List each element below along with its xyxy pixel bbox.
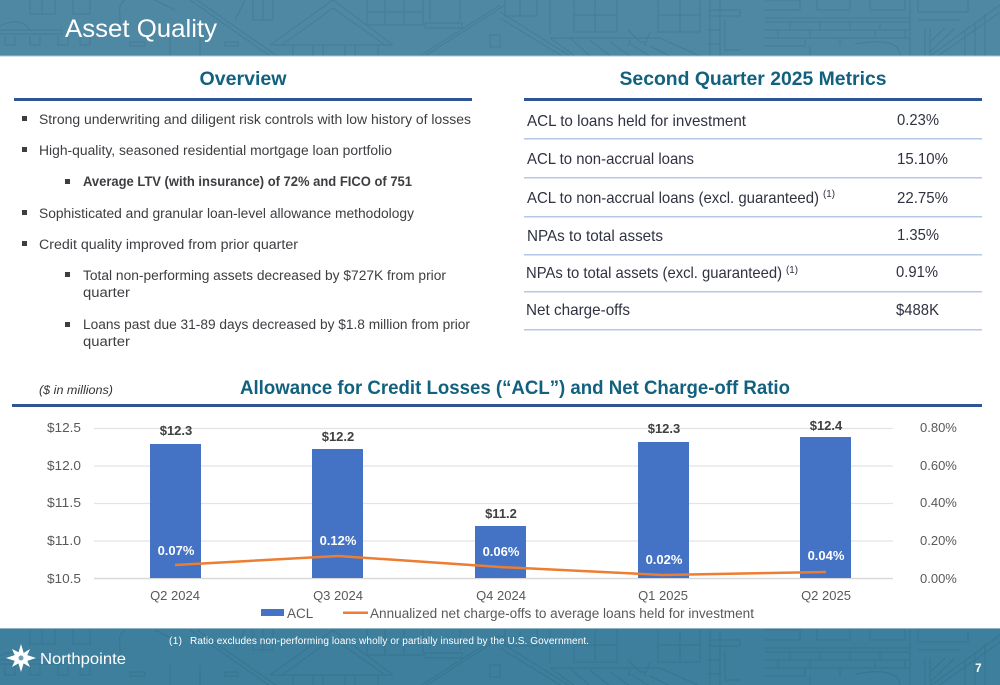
overview bullet list: quarter [83,334,131,349]
ACL value labels: $12.2 [322,429,354,444]
metrics table: 1.35% [897,227,939,244]
metrics table [524,112,982,330]
overview bullet list: Strong underwriting and diligent risk controls with low history of losses [39,112,471,127]
right axis labels: 0.20% [920,533,957,548]
overview bullet list [22,112,471,349]
right axis labels [920,420,957,586]
metrics table: (1) [823,189,835,200]
legend: ACL [287,606,314,621]
icon: compass star [6,644,36,672]
metrics table: ACL to loans held for investment [527,113,747,130]
ratio labels [158,533,845,567]
overview bullet list: Loans past due 31-89 days decreased by $1.8 million from prior [83,317,471,332]
ACL value labels: $12.3 [160,423,192,438]
chart heading: Allowance for Credit Losses (“ACL”) and Net Charge-off Ratio [240,378,790,399]
overview bullet list: High-quality, seasoned residential mortgage loan portfolio [39,143,392,158]
overview bullet list: Sophisticated and granular loan-level allowance methodology [39,206,414,221]
ratio labels: 0.07% [158,543,195,558]
metrics table: 0.23% [897,112,939,129]
metrics table: 22.75% [897,190,948,207]
category labels: Q2 2025 [801,588,851,603]
logo wordmark: Northpointe [40,651,126,668]
overview heading: Overview [200,69,287,90]
net charge-off line [175,556,826,575]
legend: Annualized net charge-offs to average loans held for investment [370,606,754,621]
title: Asset Quality [65,15,218,43]
metrics table: ACL to non-accrual loans (excl. guaranteed) [527,190,819,207]
metrics table: $488K [896,302,939,319]
metrics table: Net charge-offs [526,302,630,319]
metrics heading: Second Quarter 2025 Metrics [620,69,886,90]
category labels: Q3 2024 [313,588,363,603]
metrics table: NPAs to total assets (excl. guaranteed) [526,265,782,282]
footnote: (1) [169,636,182,647]
ACL value labels: $12.4 [810,418,843,433]
category labels: Q2 2024 [150,588,200,603]
ACL value labels [160,418,843,521]
right axis labels: 0.80% [920,420,957,435]
metrics table: 15.10% [897,151,948,168]
left axis labels: $11.0 [47,533,81,548]
right axis labels: 0.60% [920,458,957,473]
overview bullet list: Total non-performing assets decreased by $727K from prior [83,268,447,283]
page number: 7 [975,661,982,675]
metrics table: 0.91% [896,264,938,281]
ratio labels: 0.04% [808,548,845,563]
left axis labels: $10.5 [47,571,81,586]
category labels: Q1 2025 [638,588,688,603]
left axis labels: $12.0 [47,458,81,473]
overview bullet list: quarter [83,285,131,300]
chart: ACL and net charge-off ratio [47,418,957,621]
category labels [150,588,851,603]
logo: Northpointe [6,644,126,672]
ACL bars [150,437,851,578]
right axis labels: 0.40% [920,495,957,510]
panel: overview [14,69,472,349]
right axis labels: 0.00% [920,571,957,586]
left axis labels: $11.5 [47,495,81,510]
footnote: Ratio excludes non-performing loans wholly or partially insured by the U.S. Government. [190,636,589,647]
ACL value labels: $11.2 [485,506,517,521]
units note: ($ in millions) [39,383,113,397]
metrics table: (1) [786,265,798,276]
metrics table: NPAs to total assets [527,228,663,245]
ratio labels: 0.02% [646,552,683,567]
overview bullet list: Average LTV (with insurance) of 72% and FICO of 751 [83,174,412,189]
ACL value labels: $12.3 [648,421,680,436]
footer banner [0,628,1000,685]
ratio labels: 0.06% [483,544,520,559]
ratio labels: 0.12% [320,533,357,548]
panel: second quarter 2025 metrics [524,69,982,330]
left axis labels [47,420,81,586]
category labels: Q4 2024 [476,588,526,603]
metrics table: ACL to non-accrual loans [527,151,694,168]
overview bullet list: Credit quality improved from prior quarter [39,237,299,252]
left axis labels: $12.5 [47,420,81,435]
header banner [0,0,1000,56]
